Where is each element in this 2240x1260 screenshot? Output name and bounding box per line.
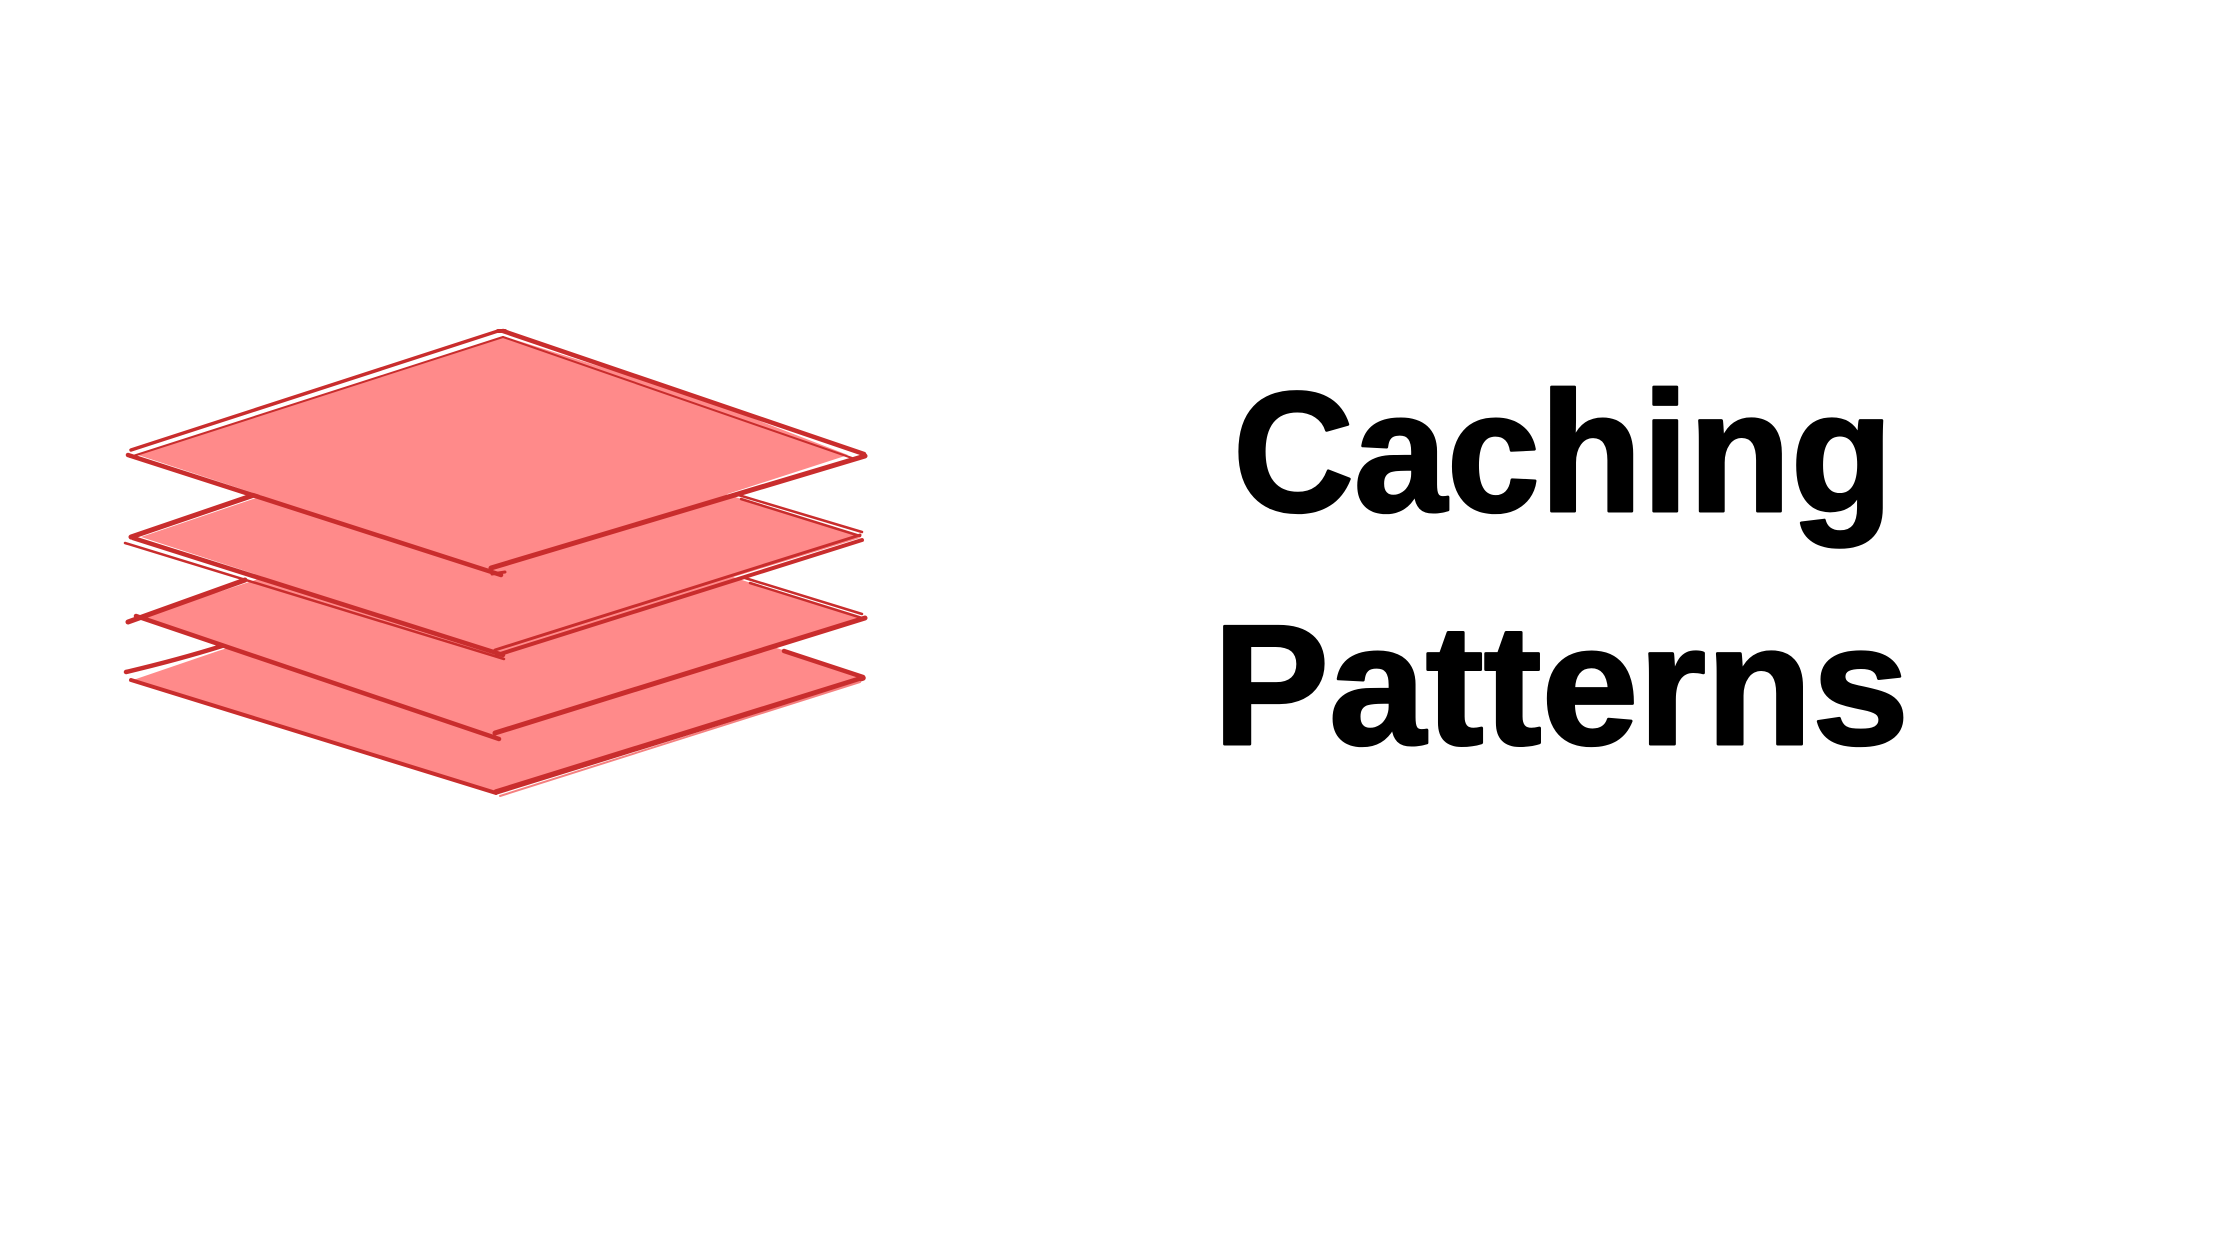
layer 4 (bottom sheet) <box>126 560 863 796</box>
title: Caching Patterns <box>1213 357 1909 781</box>
icon: stacked layers <box>125 331 865 796</box>
title line 1: Caching <box>1233 357 1893 548</box>
layer 1 (top sheet) <box>128 331 865 575</box>
layer 2 <box>125 420 862 659</box>
layer 3 <box>128 500 865 739</box>
title line 2: Patterns <box>1213 590 1909 781</box>
